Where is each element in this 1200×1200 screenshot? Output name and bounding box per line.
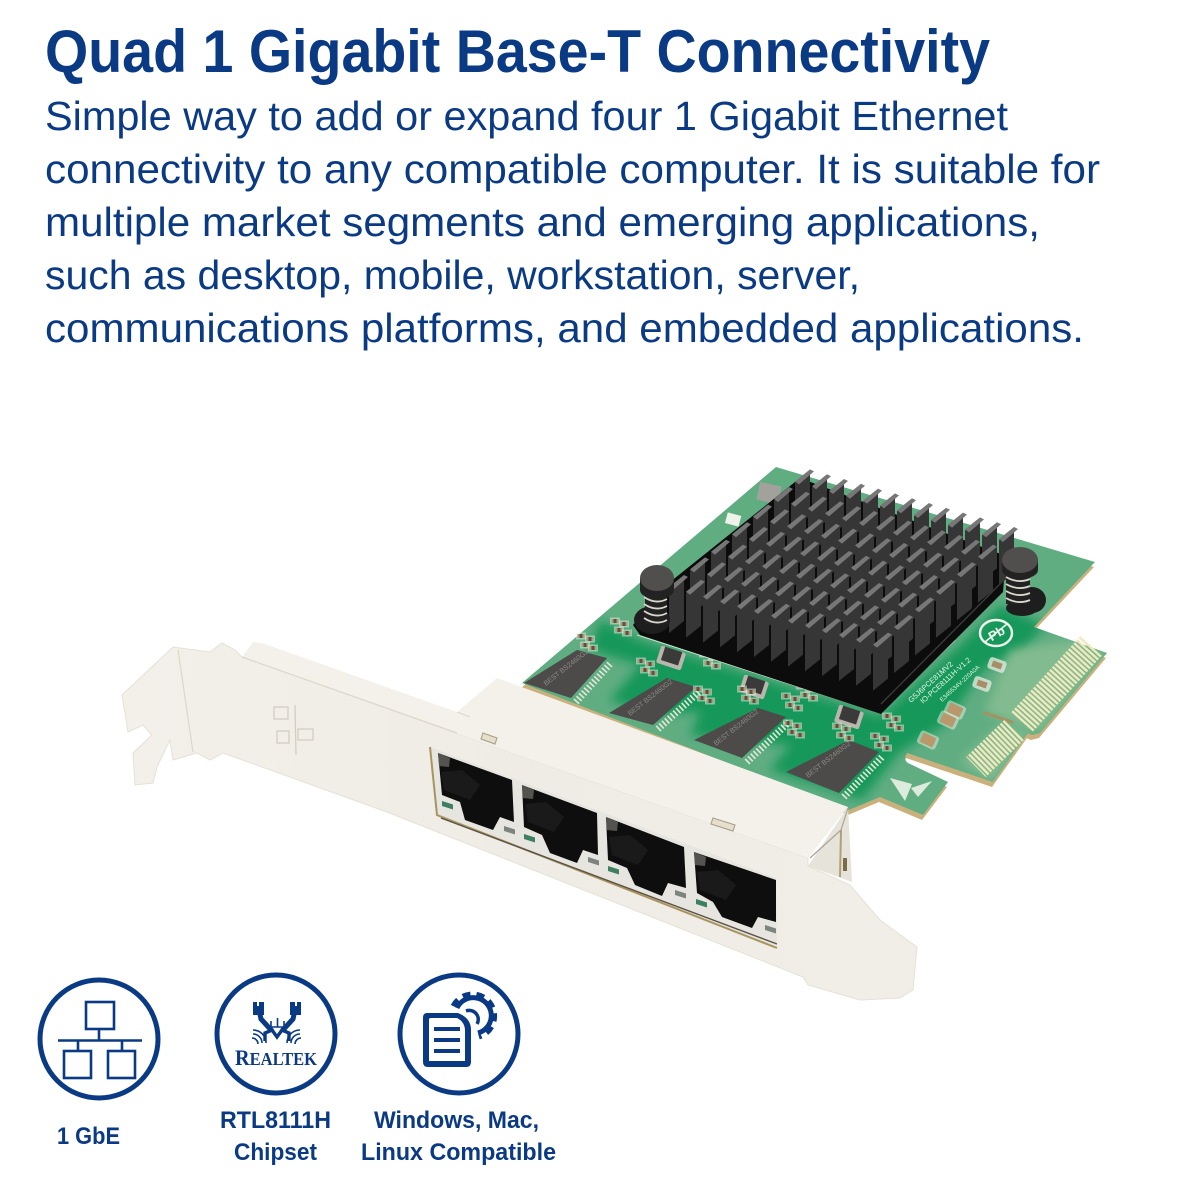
RJ45 port 4	[694, 852, 776, 928]
silkscreen marks: E345534V-220A0A	[939, 665, 981, 703]
description text block: multiple market segments and emerging applications,	[45, 199, 1040, 245]
PCB slot	[985, 713, 1012, 722]
silkscreen marks: G5J6PCE81MV2	[906, 660, 955, 704]
small inductors	[656, 645, 864, 730]
icon: RoHS mark: Pb	[986, 623, 1008, 644]
bracket front plate	[122, 643, 917, 1000]
transformer chips: BEST BS2460G2	[805, 741, 852, 780]
spring post left	[634, 565, 674, 634]
bracket side flange	[808, 807, 852, 882]
description text block: such as desktop, mobile, workstation, server,	[45, 252, 860, 298]
bracket slots	[481, 733, 735, 831]
feature: RTL8111H chipset	[217, 975, 335, 1166]
RJ45 port 3	[606, 817, 686, 896]
icon: network topology	[40, 980, 158, 1098]
description text block: communications platforms, and embedded applications.	[45, 305, 1084, 351]
feature: 1 GbE	[40, 980, 158, 1150]
metal bracket	[122, 642, 917, 1000]
black heat sink	[633, 469, 1018, 714]
RJ45 port 1	[438, 753, 514, 830]
icon: document with gear	[400, 975, 518, 1093]
label: RTL8111H Chipset: Chipset	[234, 1139, 317, 1166]
description text block: Simple way to add or expand four 1 Gigabit Ethernet	[45, 93, 1009, 139]
transformer chips	[524, 649, 882, 797]
description text block	[45, 93, 1100, 351]
gold edge connector fingers	[976, 646, 1091, 767]
description text block: connectivity to any compatible computer. It is suitable for	[45, 146, 1100, 192]
icon: Realtek logo	[217, 975, 335, 1093]
title: Quad 1 Gigabit Base-T Connectivity	[45, 18, 991, 85]
label: Windows, Mac, Linux Compatible: Linux Compatible	[361, 1139, 556, 1166]
label: Windows, Mac, Linux Compatible: Windows, Mac,	[374, 1107, 539, 1134]
transformer chips: BEST BS2460G2	[713, 709, 760, 748]
transformer chips: BEST BS2460G2	[543, 649, 590, 688]
bracket top flange	[242, 642, 848, 858]
label: 1 GbE: 1 GbE	[57, 1123, 120, 1150]
feature: OS compatibility	[361, 975, 556, 1166]
port opening	[430, 747, 777, 948]
transformer chips: BEST BS2460G2	[627, 679, 674, 718]
port LEDs	[442, 801, 776, 934]
spring post right	[1002, 547, 1046, 616]
RJ45 port 2	[522, 785, 598, 863]
silkscreen marks: IO-PCE8111H-V1.2	[918, 655, 972, 705]
icon: Realtek logo: REALTEK	[235, 1045, 317, 1070]
label: RTL8111H Chipset	[220, 1107, 331, 1166]
bracket fold lines	[178, 650, 470, 752]
label: RTL8111H Chipset: RTL8111H	[220, 1107, 331, 1134]
silkscreen marks	[637, 635, 981, 713]
label: Windows, Mac, Linux Compatible	[361, 1107, 556, 1166]
circuit board	[521, 467, 1107, 820]
stamped bracket marks	[274, 705, 313, 755]
icon: ESD warning triangle	[890, 778, 932, 801]
surface mount components	[576, 482, 1008, 752]
product illustration: quad port network card	[122, 467, 1107, 1000]
icon: RoHS mark	[980, 620, 1012, 646]
